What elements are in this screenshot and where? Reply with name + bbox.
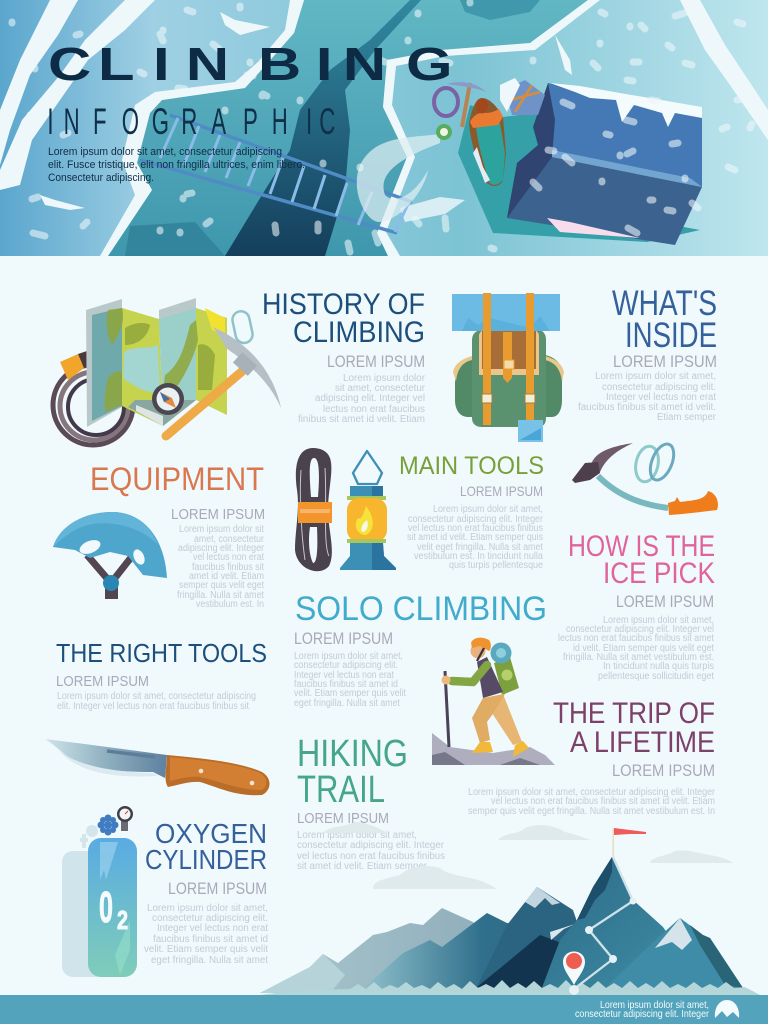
- body text: Integer vel lectus non erat: [606, 392, 716, 403]
- panel: hero ice scene: [0, 0, 768, 256]
- body text: sit amet, consectetur: [335, 383, 426, 394]
- heading: CLIMBING: [293, 316, 425, 349]
- icon: helmet: [53, 512, 167, 599]
- body text: semper quis velit eget: [179, 580, 264, 591]
- body text: vestibulum est. In: [196, 599, 264, 610]
- body text: vel lectus non erat faucibus finibus sit amet id velit. Etiam: [491, 796, 715, 807]
- rope coil and ice axe: [434, 82, 486, 127]
- body text: finibus sit amet id velit. Etiam: [298, 414, 425, 425]
- body text: Integer vel lectus non erat: [294, 670, 394, 681]
- heading: A LIFETIME: [570, 726, 715, 759]
- body text: Integer vel lectus non erat: [157, 923, 268, 934]
- heading: HIKING: [297, 733, 408, 775]
- body text: consectetur adipiscing elit. Integer vel: [566, 624, 714, 635]
- body text: quis turpis pellentesque: [449, 560, 544, 571]
- panel: oxygen cylinder text: [144, 818, 268, 966]
- title: CLINBING: [48, 39, 452, 90]
- footer text: [575, 1000, 710, 1020]
- valve: [98, 814, 118, 836]
- heading: [568, 530, 715, 590]
- subheading: LOREM IPSUM: [327, 353, 425, 371]
- body text: Etiam semper: [657, 412, 717, 423]
- heading: WHAT'S: [612, 284, 717, 323]
- fissure: [225, 0, 421, 256]
- subheading: LOREM IPSUM: [168, 880, 267, 898]
- heading: SOLO CLIMBING: [295, 590, 547, 628]
- compass: [152, 383, 184, 415]
- heading: HISTORY OF: [262, 288, 425, 321]
- body text: Lorem ipsum dolor sit amet,: [294, 651, 403, 662]
- clouds: [322, 822, 733, 889]
- body text: consectetur adipiscing elit.: [294, 660, 398, 671]
- subheading: LOREM IPSUM: [613, 353, 717, 371]
- footer text: consectetur adipiscing elit. Integer: [575, 1009, 710, 1020]
- ice axe: [166, 368, 246, 436]
- panel: the trip of a lifetime: [468, 697, 716, 817]
- hero text block: [48, 146, 305, 184]
- body text: lectus non erat faucibus: [323, 404, 425, 415]
- crevasse: [108, 0, 588, 256]
- subheading: LOREM IPSUM: [56, 673, 149, 690]
- panel: what's inside: [578, 284, 717, 423]
- body text: [297, 830, 445, 872]
- body text: faucibus finibus sit: [192, 562, 264, 573]
- green ring: [436, 124, 452, 140]
- body text: In tincidunt nulla quis turpis: [603, 661, 714, 672]
- subtitle: INFOGRAPHIC: [47, 101, 335, 142]
- body text: faucibus finibus sit amet id: [153, 934, 268, 945]
- body text: adipiscing elit. Integer: [178, 543, 265, 554]
- body text: lectus non erat faucibus finibus sit amet: [558, 633, 714, 644]
- gauge: [117, 806, 133, 831]
- icon: ice tool and carabiners: [572, 441, 718, 515]
- heading: ICE PICK: [603, 557, 715, 590]
- body text: [558, 615, 714, 682]
- hero text block: Lorem ipsum dolor sit amet, consectetur adipiscing: [48, 146, 282, 158]
- icon: map, rope, compass and ice axe: [53, 298, 281, 445]
- trail route: [574, 857, 633, 989]
- body text: [294, 651, 406, 709]
- body text: eget fringilla. Nulla sit amet: [151, 955, 268, 966]
- body text: velit. Etiam semper quis velit: [294, 688, 406, 699]
- heading: EQUIPMENT: [90, 461, 264, 497]
- body text: semper quis velit eget fringilla. Nulla sit amet vestibulum est. In: [468, 806, 715, 817]
- body text: Lorem ipsum dolor sit amet,: [147, 903, 268, 914]
- body text: sit amet id velit. Etiam semper quis: [407, 532, 543, 543]
- footer band: [0, 995, 768, 1024]
- heading: HOW IS THE: [568, 530, 715, 563]
- heading: [612, 284, 717, 355]
- body text: Lorem ipsum dolor: [343, 373, 426, 384]
- body text: vestibulum est. In tincidunt nulla: [414, 551, 544, 562]
- body text: amet id velit. Etiam: [189, 571, 264, 582]
- icon: oxygen cylinder: [62, 806, 137, 977]
- body text: amet, consectetur: [194, 534, 265, 545]
- body text: Lorem ipsum dolor sit amet,: [603, 615, 714, 626]
- body text: id velit. Etiam semper quis velit eget: [573, 643, 714, 654]
- body text: consectetur adipiscing elit.: [152, 913, 268, 924]
- body text: Lorem ipsum dolor sit amet, consectetur adipiscing elit. Integer: [468, 787, 716, 798]
- footer text: Lorem ipsum dolor sit amet,: [600, 1000, 709, 1011]
- subheading: LOREM IPSUM: [616, 593, 714, 611]
- panel: hiking trail: [297, 733, 445, 872]
- ice edge left: [0, 0, 78, 165]
- panel: solo climbing: [294, 590, 547, 709]
- heading: TRAIL: [297, 769, 385, 811]
- body text: consectetur adipiscing elit. Integer: [297, 840, 445, 851]
- body text: [57, 691, 256, 712]
- subheading: LOREM IPSUM: [294, 630, 393, 648]
- body text: Lorem ipsum dolor sit amet,: [297, 830, 417, 841]
- footer logo: [715, 1000, 739, 1018]
- body text: Lorem ipsum dolor sit: [179, 524, 264, 535]
- ice block: [540, 83, 702, 187]
- icon: backpack: [452, 293, 564, 442]
- body text: velit eget fringilla. Nulla sit amet: [417, 542, 543, 553]
- panel: equipment: [90, 461, 265, 610]
- body text: vel lectus non erat: [193, 552, 264, 563]
- body text: vel lectus non erat faucibus finibus: [297, 851, 445, 862]
- heading: THE RIGHT TOOLS: [56, 638, 267, 668]
- panel: how is the ice pick: [558, 530, 715, 682]
- body text: consectetur adipiscing elit.: [602, 382, 716, 393]
- body text: velit. Etiam semper quis velit: [144, 944, 268, 955]
- body text: Lorem ipsum dolor sit amet,: [595, 371, 716, 382]
- carabiner: [231, 310, 254, 345]
- panel: main tools: [399, 452, 544, 571]
- body text: [578, 371, 717, 423]
- body text: fringilla. Nulla sit amet vestibulum est.: [563, 652, 714, 663]
- summit flag: [612, 828, 646, 857]
- teal base under gear: [458, 105, 700, 242]
- body text: faucibus finibus sit amet id: [294, 679, 398, 690]
- O2 label: 0: [99, 883, 113, 932]
- body text: [177, 524, 265, 610]
- heading: [553, 697, 715, 759]
- body text: Lorem ipsum dolor sit amet, consectetur adipiscing: [57, 691, 256, 702]
- body text: pellentesque sollicitudin eget: [598, 671, 714, 682]
- icon: coiled rope: [295, 448, 332, 571]
- body text: adipiscing elit. Integer vel: [315, 393, 425, 404]
- ice edge centre right: [377, 0, 600, 256]
- heading: OXYGEN: [155, 818, 267, 849]
- body text: [468, 787, 716, 817]
- chart-like scene: mountains: [260, 828, 760, 995]
- body text: [144, 903, 268, 966]
- subheading: LOREM IPSUM: [460, 483, 543, 499]
- heading: [297, 733, 408, 811]
- body text: sit amet id velit. Etiam semper: [297, 861, 428, 872]
- heading: [145, 818, 267, 875]
- location pin: [563, 952, 585, 985]
- heading: THE TRIP OF: [553, 697, 715, 730]
- icon: lantern: [340, 451, 396, 570]
- subheading: LOREM IPSUM: [612, 762, 715, 780]
- body text: consectetur adipiscing elit. Integer: [408, 514, 544, 525]
- body text: [407, 504, 544, 571]
- heading: INSIDE: [625, 316, 717, 355]
- white rope crescent: [357, 134, 440, 222]
- snow flecks: [12, 2, 752, 252]
- heading: [262, 288, 425, 349]
- sleeping bag: [469, 98, 506, 186]
- body text: fringilla. Nulla sit amet: [177, 590, 264, 601]
- hero text block: elit. Fusce tristique, elit non fringilla ultrices, enim libero.: [48, 159, 305, 171]
- heading: MAIN TOOLS: [399, 452, 544, 480]
- ladder: [140, 115, 412, 233]
- subheading: LOREM IPSUM: [297, 810, 389, 827]
- icon: knife: [45, 739, 270, 795]
- hero text block: Consectetur adipiscing.: [48, 172, 154, 184]
- body text: [298, 373, 426, 425]
- body text: elit. Integer vel lectus non erat faucibus finibus sit: [57, 701, 249, 712]
- ground and grass: [260, 980, 760, 995]
- heading: CYLINDER: [145, 844, 267, 875]
- O2 label: 2: [117, 905, 128, 935]
- body text: Lorem ipsum dolor sit amet,: [433, 504, 543, 515]
- icon: hiker on rock: [432, 638, 555, 765]
- small backpack: [500, 78, 545, 115]
- subheading: LOREM IPSUM: [171, 506, 265, 523]
- rope coil: [53, 365, 133, 445]
- panel: history of climbing: [262, 288, 426, 425]
- body text: eget fringilla. Nulla sit amet: [294, 698, 400, 709]
- body text: vel lectus non erat faucibus finibus: [408, 523, 543, 534]
- panel: the right tools: [56, 638, 267, 712]
- body text: faucibus finibus sit amet id velit.: [578, 402, 716, 413]
